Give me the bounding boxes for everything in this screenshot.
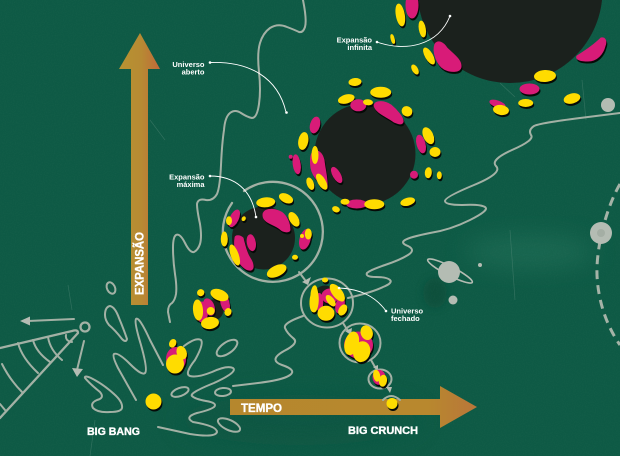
label: big bang: BIG BANG [87,426,140,438]
label: big crunch: BIG CRUNCH [348,425,418,437]
callout: universo aberto [172,60,288,114]
universe stage: closed collapse 2 [340,324,380,363]
callout: universo fechado: fechado [391,314,420,323]
callout: universo fechado: Universo [391,306,424,316]
callout: expansao infinita [337,15,451,52]
callout: expansao maxima [169,172,257,218]
chalk arrow: collapse step 3 [371,360,378,371]
callout: expansao maxima: Expansão [169,172,205,182]
universe stage: maximum expansion [221,182,323,282]
callout: universo aberto: aberto [182,68,205,76]
open universe chalk line [168,0,306,322]
planet: top right moon [601,98,615,112]
closed universe chalk line [233,316,303,386]
chalk arrow: collapse step 2 [343,323,352,335]
axis label: expansion: EXPANSÃO [134,232,146,295]
universe stage: growing cluster [193,287,232,330]
planet: saturn [426,256,482,304]
universe stage: open universe [289,78,441,213]
universe stage: infinite expansion [390,0,606,116]
callout: expansao maxima: máxima [177,180,205,189]
horizontal axis arrow: time [230,386,477,428]
vertical axis arrow: expansion [119,33,160,305]
universe stage: early cluster [166,338,188,373]
universe stage: closed collapse 1 [301,278,353,328]
callout: universo fechado [338,287,424,323]
planet: dashed orbit with moon [590,184,620,345]
chalk arrow: collapse from max to closed [299,272,311,285]
axis label: time: TEMPO [241,403,282,415]
universe stage: big crunch point [383,396,400,408]
cone of the observable universe [0,316,90,418]
callout: expansao infinita: Expansão [337,36,372,44]
callout: universo aberto: Universo [172,60,205,69]
chalk arrow: collapse step 4 [386,387,392,393]
universe stage: big bang point [146,394,161,409]
universe stage: closed collapse 3 [368,370,392,388]
infinite expansion chalk line [348,113,620,298]
big bang chalk burst [85,281,242,436]
callout: expansao infinita: infinita [347,43,373,52]
